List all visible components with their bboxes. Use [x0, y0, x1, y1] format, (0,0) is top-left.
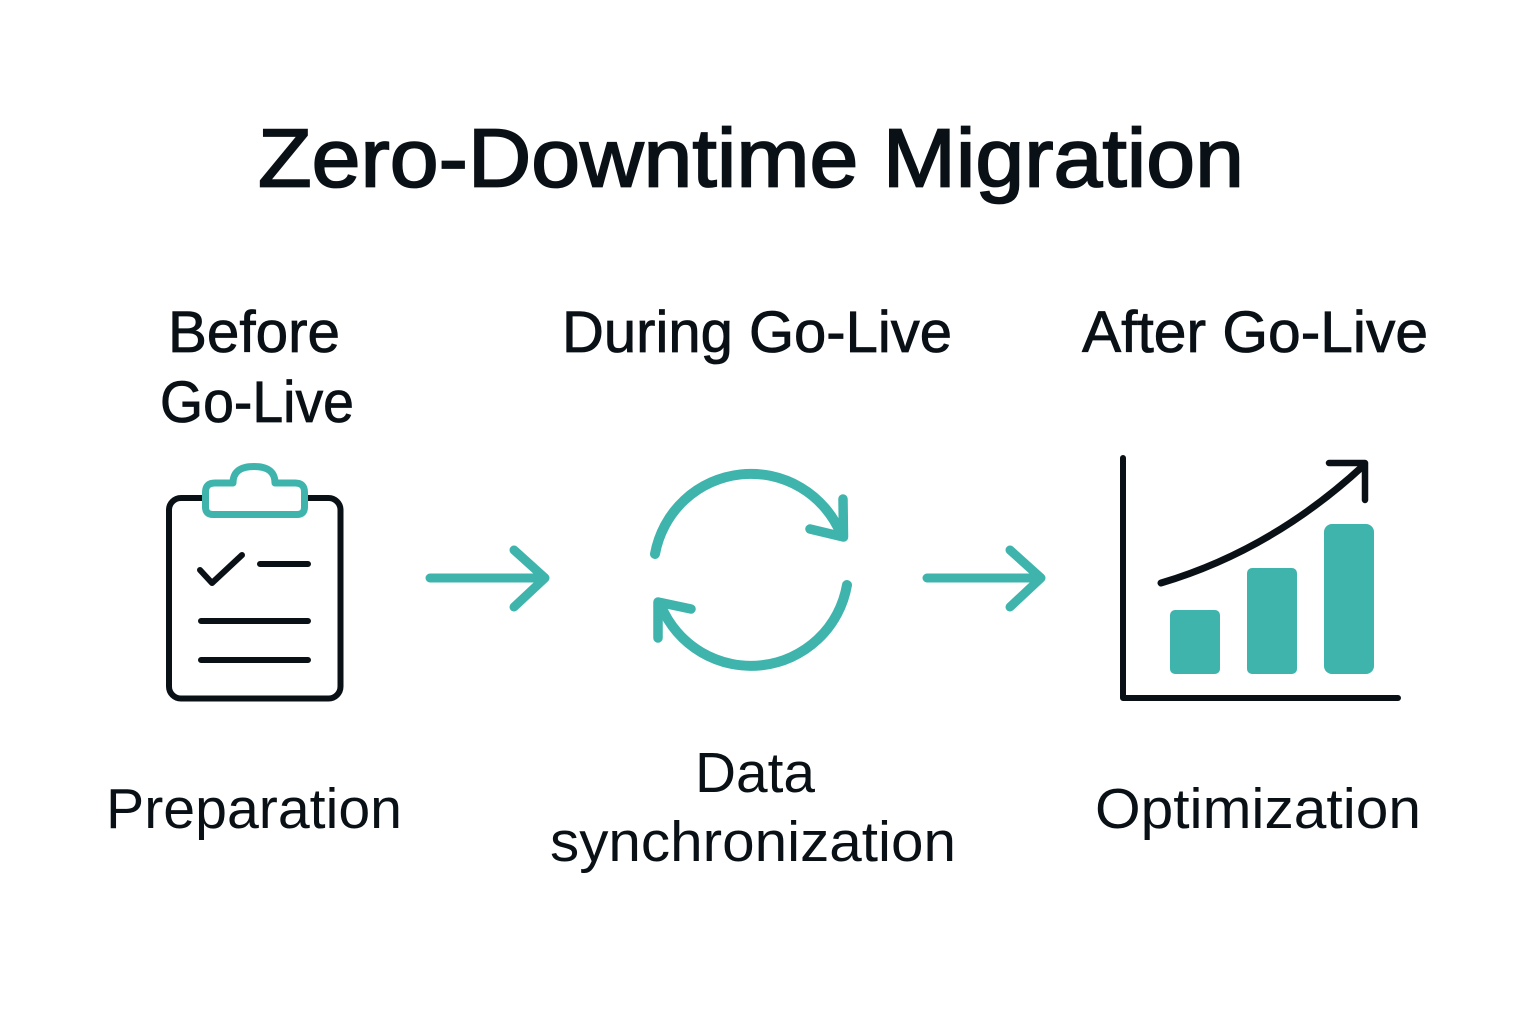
- title: Zero-Downtime Migration: [258, 112, 1244, 204]
- label: data synchronization: [550, 741, 956, 874]
- heading: during go-live: During Go-Live: [562, 300, 952, 365]
- icon: sync arrows: [655, 474, 847, 666]
- heading: before go-live: Before: [168, 300, 340, 365]
- arrow: during to after: [927, 550, 1041, 607]
- label: preparation: Preparation: [106, 777, 402, 841]
- label: optimization: Optimization: [1095, 777, 1421, 841]
- label: data synchronization: synchronization: [550, 810, 956, 874]
- icon: growth chart: [1123, 458, 1398, 698]
- icon: clipboard checklist: [169, 466, 340, 698]
- heading: after go-live: After Go-Live: [1082, 300, 1428, 365]
- arrow: before to during: [430, 550, 545, 607]
- heading: before go-live: Go-Live: [160, 370, 354, 435]
- label: data synchronization: Data: [695, 741, 815, 805]
- heading: before go-live: [160, 300, 354, 435]
